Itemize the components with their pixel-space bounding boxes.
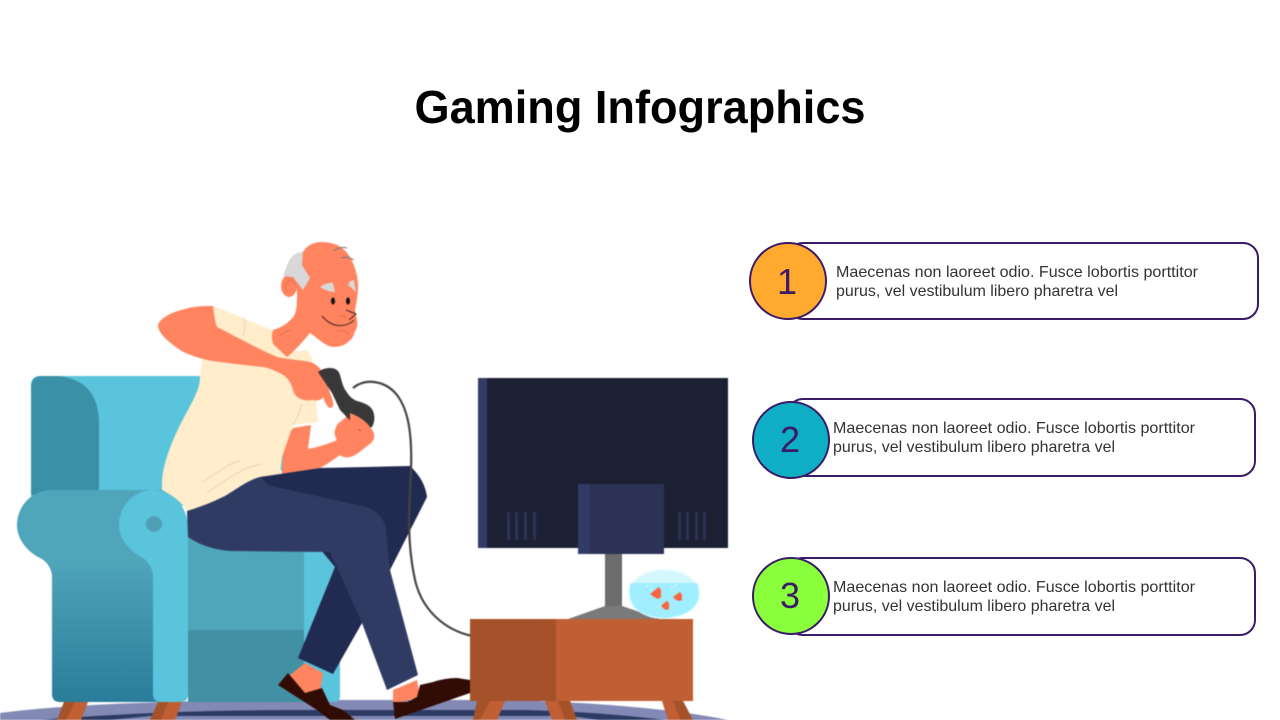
item 1 text: Maecenas non laoreet odio. Fusce lobortis porttitor (836, 264, 1199, 281)
man: raised arm (158, 306, 333, 408)
game controller (318, 368, 374, 431)
item 2 box (788, 399, 1255, 476)
man: back arm and hand (281, 413, 374, 474)
cabinet (470, 619, 693, 720)
item 3 number: 3 (780, 575, 800, 616)
title: Gaming Infographics (414, 81, 866, 133)
illustration: elderly man gaming (0, 242, 728, 720)
item 3 badge (753, 558, 829, 634)
rug (0, 700, 728, 720)
item 3 text: Maecenas non laoreet odio. Fusce lobortis porttitor (833, 579, 1196, 596)
man: feet and shoes (278, 663, 470, 720)
item 3 (753, 558, 1255, 635)
item 1 text: purus, vel vestibulum libero pharetra vel (836, 283, 1118, 300)
item 1 box (788, 243, 1258, 319)
man: neck and head (272, 242, 358, 357)
item 1 (750, 243, 1258, 319)
man: shirt (162, 306, 318, 511)
item 1 number: 1 (777, 261, 797, 302)
television (478, 378, 728, 619)
item 3 box (788, 558, 1255, 635)
fishbowl (628, 569, 700, 619)
item 2 (753, 399, 1255, 478)
item 2 text: Maecenas non laoreet odio. Fusce lobortis porttitor (833, 420, 1196, 437)
item 1 badge (750, 243, 826, 319)
item 3 text: purus, vel vestibulum libero pharetra vel (833, 598, 1115, 615)
item 2 number: 2 (780, 419, 800, 460)
item 2 text: purus, vel vestibulum libero pharetra vel (833, 439, 1115, 456)
armchair (17, 376, 340, 720)
game cable (353, 382, 472, 636)
man: trousers (187, 466, 427, 690)
item 2 badge (753, 402, 829, 478)
man: gripping fingers (350, 413, 372, 437)
man: chair gap accent (275, 450, 283, 471)
